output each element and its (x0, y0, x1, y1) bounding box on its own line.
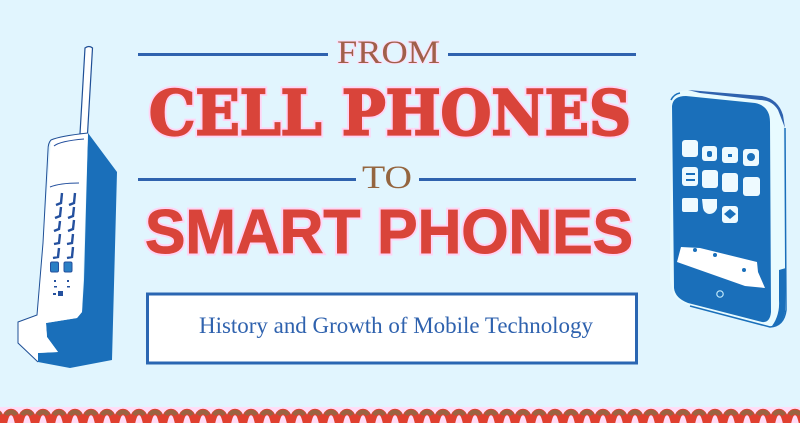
phone front (18, 133, 88, 362)
upper edge (688, 90, 785, 128)
slider dots (693, 248, 746, 272)
rule: beside FROM (138, 53, 636, 56)
heading: CELL PHONES: CELL PHONES (149, 76, 631, 150)
slider (677, 247, 765, 288)
screen (672, 96, 771, 322)
heading: CELL PHONES: CELL PHONES (149, 76, 631, 150)
phone side shadow (38, 133, 117, 368)
front outline (18, 133, 88, 362)
left edge (671, 93, 680, 100)
heading: TO: TO (362, 160, 412, 196)
heading: SMART PHONES: SMART PHONES (145, 198, 633, 267)
heading: FROM: FROM (337, 35, 440, 71)
icon: smartphone (670, 90, 786, 327)
decoration: coiled cord (0, 405, 800, 423)
subtitle box (148, 294, 636, 363)
home button (717, 291, 723, 297)
heading: SMART PHONES: SMART PHONES (145, 198, 633, 267)
subtitle box: History and Growth of Mobile Technology (199, 313, 593, 338)
icon details (686, 151, 755, 219)
rule: beside TO (138, 178, 636, 181)
phone body (670, 90, 786, 327)
side shadow (772, 268, 786, 326)
icon: brick cell phone (18, 46, 117, 368)
antenna (80, 46, 92, 134)
app icons (682, 140, 760, 223)
earpiece curve (50, 139, 84, 187)
small controls (53, 280, 70, 296)
keypad (53, 193, 75, 258)
screen buttons (50, 262, 72, 272)
right and bottom outline (690, 128, 786, 327)
